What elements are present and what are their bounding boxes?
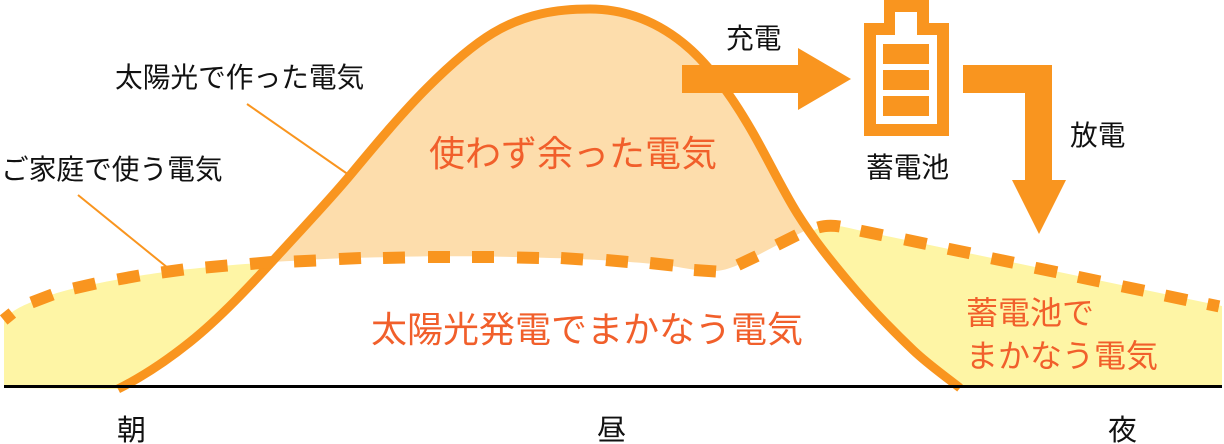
arrow: charge <box>682 48 851 110</box>
area: morning electricity supplied by battery <box>4 262 274 389</box>
label: electricity covered by battery: 蓄電池で <box>966 295 1094 331</box>
label: household electricity: ご家庭で使う電気 <box>1 154 223 185</box>
label: battery: 蓄電池 <box>866 152 949 183</box>
area: night electricity supplied by battery <box>810 225 1222 388</box>
leader line: household electricity <box>78 195 168 268</box>
leader line: solar electricity <box>247 104 349 175</box>
curve: solar generation <box>118 9 960 389</box>
icon: battery <box>864 0 949 136</box>
label: solar electricity: 太陽光で作った電気 <box>115 62 364 93</box>
arrow: discharge <box>963 65 1066 234</box>
area: unused surplus solar electricity <box>274 9 808 271</box>
curve: household consumption, dashed <box>4 226 1219 320</box>
axis: time baseline <box>4 385 1222 388</box>
label: electricity covered by battery: まかなう電気 <box>966 338 1158 374</box>
label: charge: 充電 <box>726 23 781 54</box>
label: discharge: 放電 <box>1070 120 1125 151</box>
label: electricity covered by solar: 太陽光発電でまかなう電気 <box>371 309 803 350</box>
label: surplus electricity: 使わず余った電気 <box>429 133 717 174</box>
